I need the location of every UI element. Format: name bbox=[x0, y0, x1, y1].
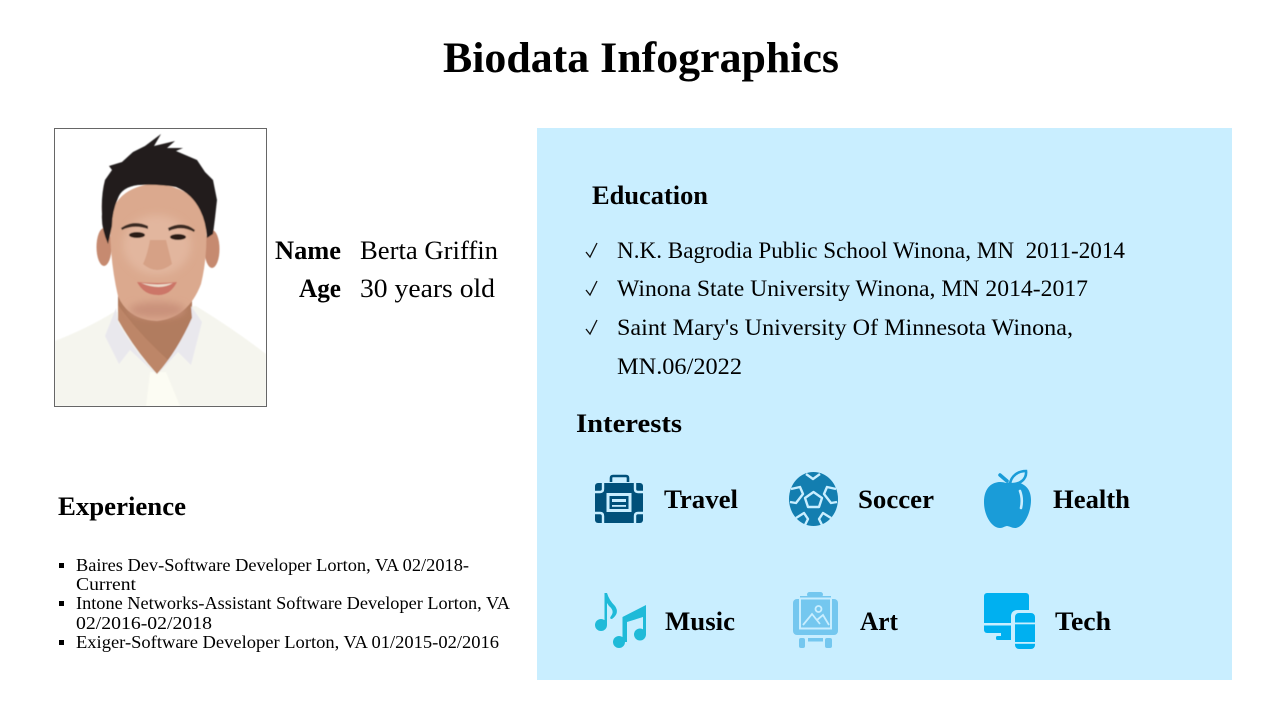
neck bbox=[117, 296, 192, 374]
health label: Health bbox=[1053, 485, 1131, 514]
icon: health apple bbox=[984, 471, 1031, 528]
experience list: Baires Dev-Software Developer Lorton, VA 02/2018- bbox=[76, 555, 469, 575]
age value: 30 years old bbox=[360, 274, 495, 303]
experience list bbox=[59, 555, 510, 652]
face bbox=[110, 184, 206, 321]
icon: art easel bbox=[793, 592, 838, 648]
experience list: Intone Networks-Assistant Software Developer Lorton, VA bbox=[76, 593, 510, 613]
icon: tech devices bbox=[984, 593, 1038, 652]
icon: music notes bbox=[595, 593, 646, 648]
education list: MN.06/2022 bbox=[617, 354, 742, 380]
tech label: Tech bbox=[1055, 607, 1112, 636]
experience list: Exiger-Software Developer Lorton, VA 01/2015-02/2016 bbox=[76, 632, 499, 652]
education list bbox=[586, 238, 1125, 380]
name and age bbox=[275, 236, 498, 303]
hair bbox=[102, 134, 217, 244]
art label: Art bbox=[860, 607, 898, 636]
age label: Age bbox=[299, 274, 341, 303]
experience section bbox=[58, 492, 510, 652]
portrait photo bbox=[54, 128, 266, 406]
collar bbox=[106, 309, 148, 366]
interests heading: Interests bbox=[576, 409, 682, 438]
nose bbox=[143, 240, 172, 270]
icon: travel suitcase bbox=[595, 476, 643, 523]
shirt bbox=[55, 306, 266, 406]
icon: soccer ball bbox=[789, 472, 838, 526]
panel: education and interests bbox=[537, 128, 1232, 680]
title: Biodata Infographics bbox=[443, 35, 839, 82]
name value: Berta Griffin bbox=[360, 236, 498, 265]
name label: Name bbox=[275, 236, 341, 265]
eyebrows bbox=[121, 223, 148, 230]
experience heading: Experience bbox=[58, 492, 186, 521]
music label: Music bbox=[665, 607, 735, 636]
travel label: Travel bbox=[664, 485, 738, 514]
education list: Winona State University Winona, MN 2014-2017 bbox=[617, 276, 1088, 302]
soccer label: Soccer bbox=[858, 485, 934, 514]
experience list: Current bbox=[76, 574, 136, 594]
education heading: Education bbox=[592, 181, 709, 210]
education list: N.K. Bagrodia Public School Winona, MN 2011-2014 bbox=[617, 238, 1125, 264]
ears bbox=[96, 228, 112, 266]
mouth bbox=[137, 282, 177, 295]
eyes bbox=[129, 232, 145, 238]
education list: Saint Mary's University Of Minnesota Winona, bbox=[617, 315, 1073, 341]
experience list: 02/2016-02/2018 bbox=[76, 613, 212, 633]
